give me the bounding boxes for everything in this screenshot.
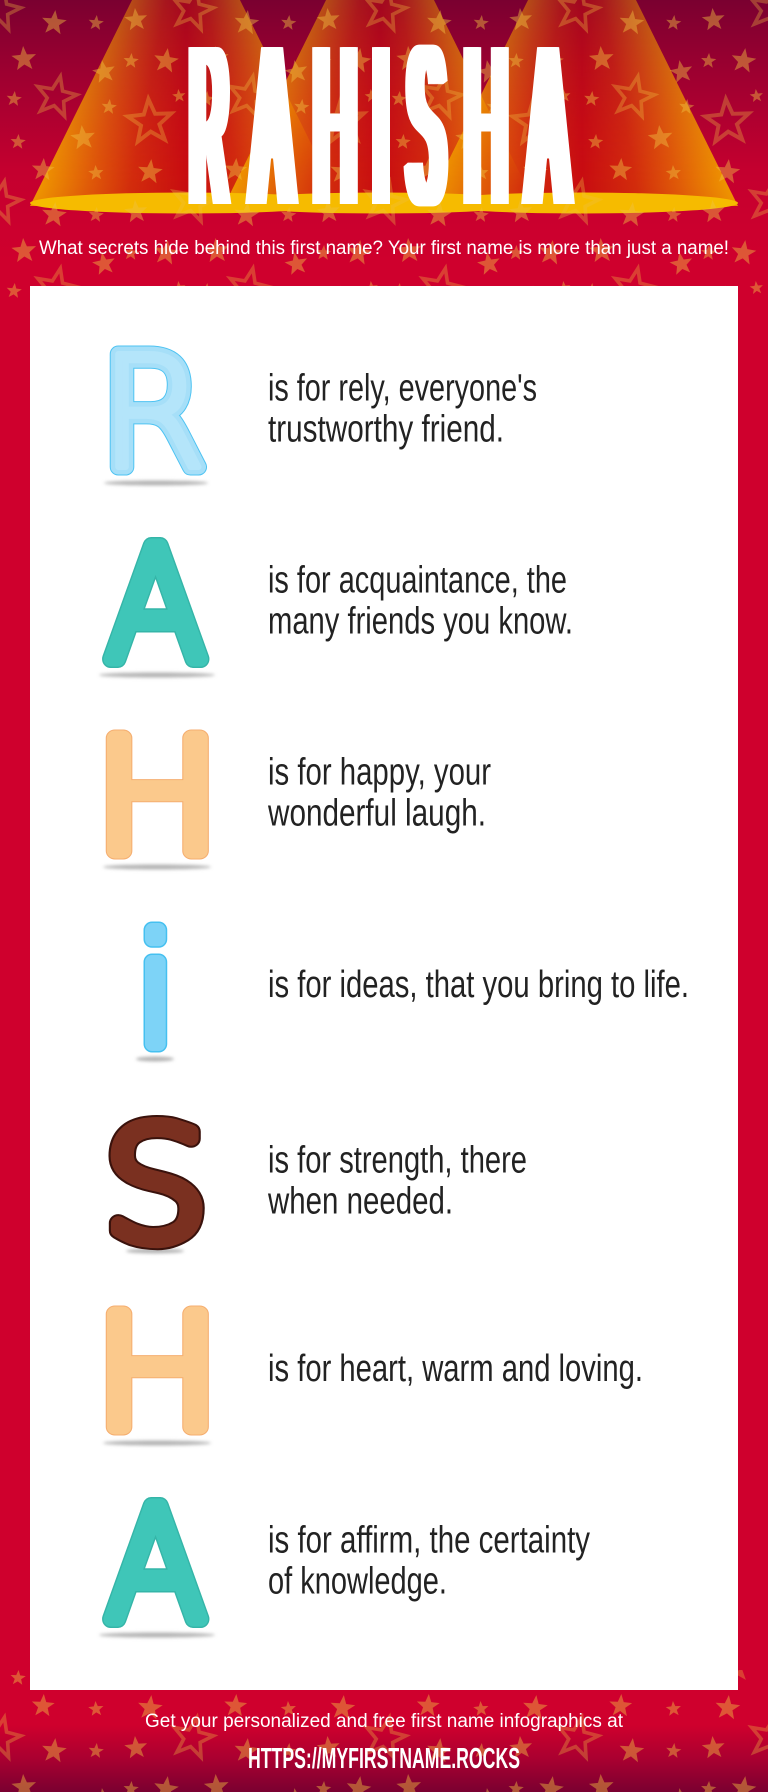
- title: [188, 0, 575, 253]
- text: H meaning: [267, 752, 491, 834]
- text: A meaning: is for acquaintance, the: [268, 560, 567, 602]
- text: A meaning: many friends you know.: [268, 600, 573, 642]
- text: H meaning: wonderful laugh.: [267, 792, 486, 834]
- icon: letter i: i: [135, 906, 177, 1080]
- footer text: Get your personalized and free first name infographics at: [145, 1711, 624, 1732]
- text: R meaning: [268, 368, 537, 450]
- spotlights group: [30, 0, 738, 206]
- text: A meaning: is for affirm, the certainty: [268, 1520, 590, 1562]
- icon: letter H: H: [95, 1284, 220, 1464]
- text: A meaning: [268, 560, 573, 642]
- title: H: [465, 0, 507, 253]
- text: A meaning: [268, 1520, 590, 1602]
- icon: letter R: R: [99, 323, 207, 504]
- panel: letter meanings: [30, 286, 738, 1690]
- icon: letter H: H: [95, 708, 220, 888]
- title: H: [313, 0, 356, 253]
- icon: letter H: H: [95, 708, 220, 888]
- footer text: [145, 1711, 624, 1775]
- title: I: [373, 0, 389, 253]
- spotlight: right: [426, 0, 738, 206]
- icon: letter S: S: [103, 1095, 209, 1276]
- icon: letter A: A: [106, 1476, 206, 1656]
- icon: letter A: A: [106, 516, 206, 696]
- text: R meaning: is for rely, everyone's: [268, 368, 537, 410]
- title: A: [253, 0, 291, 253]
- text: A meaning: of knowledge.: [268, 1560, 447, 1602]
- spotlight: left: [30, 0, 342, 206]
- text: H meaning: is for heart, warm and loving.: [268, 1348, 643, 1390]
- text: H meaning: is for happy, your: [268, 752, 491, 794]
- icon: letter i: i: [135, 906, 177, 1080]
- subtitle: What secrets hide behind this first name? Your first name is more than just a name!: [39, 238, 729, 259]
- icon: letter A: A: [106, 1476, 206, 1656]
- text: S meaning: when needed.: [267, 1180, 453, 1222]
- icon: letter A: A: [106, 516, 206, 696]
- spotlight: centre: [230, 0, 514, 194]
- text: S meaning: [267, 1140, 527, 1222]
- icon: letter R: R: [99, 323, 207, 504]
- title: S: [409, 0, 443, 253]
- text: S meaning: is for strength, there: [268, 1140, 527, 1182]
- title: A: [529, 0, 567, 253]
- icon: letter R: R: [99, 323, 207, 504]
- icon: letter S: S: [103, 1095, 209, 1276]
- footer link: HTTPS://MYFIRSTNAME.ROCKS: [248, 1743, 520, 1775]
- icon: letter H: H: [95, 1284, 220, 1464]
- title: R: [191, 0, 227, 253]
- text: R meaning: trustworthy friend.: [268, 408, 504, 450]
